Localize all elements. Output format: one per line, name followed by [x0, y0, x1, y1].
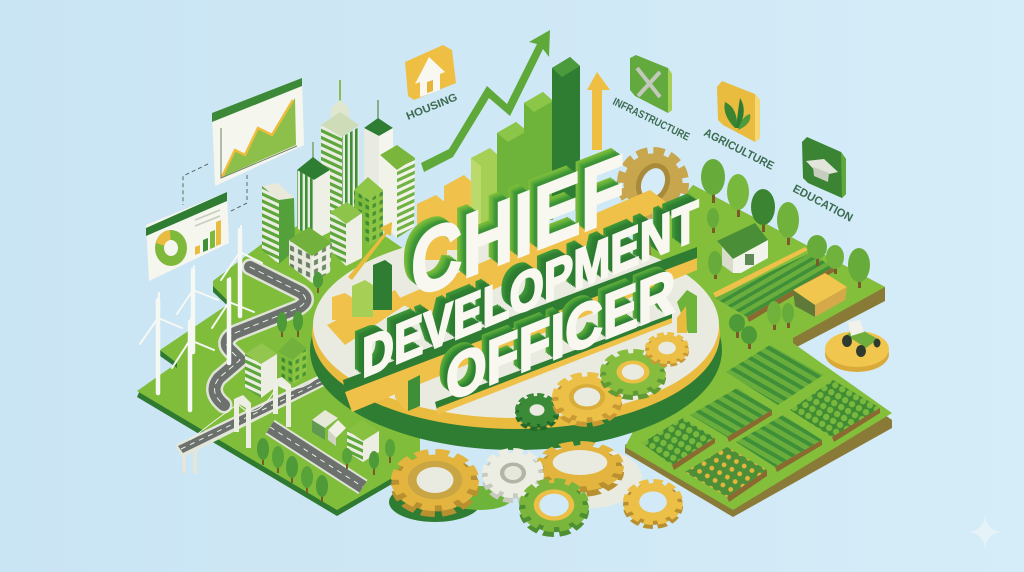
- label: education: EDUCATION: [791, 183, 854, 225]
- gears below disc: [389, 444, 679, 534]
- farm trees: [701, 159, 870, 349]
- icon: housing: [405, 45, 456, 100]
- farm house: [717, 223, 768, 273]
- icon: agriculture: [717, 81, 760, 142]
- lower road: [270, 427, 363, 487]
- dashed connector lines: [183, 164, 247, 212]
- trees bottom row: [257, 438, 395, 502]
- trees near city: [277, 272, 323, 337]
- panel: right farm land: [600, 185, 892, 517]
- panel: central disc: [310, 232, 722, 450]
- chart window: donut and bars: [146, 192, 229, 281]
- panel: left city land: [137, 205, 420, 516]
- barn: [793, 273, 847, 317]
- label: housing: HOUSING: [405, 91, 459, 123]
- wind turbines: [140, 226, 262, 410]
- icon: infrastructure: [630, 55, 672, 113]
- gears on disc: [518, 334, 686, 429]
- chart window: line chart: [212, 78, 304, 186]
- arrow: yellow up: [587, 72, 610, 150]
- gear: gold behind title: [621, 151, 685, 215]
- label: agriculture: AGRICULTURE: [702, 127, 776, 173]
- title: OFFICER: OFFICER: [446, 255, 675, 416]
- icon: sparkle watermark: [969, 516, 1001, 548]
- icon: education: [802, 137, 846, 198]
- small houses and building: [312, 410, 379, 462]
- farm fields: [642, 345, 880, 502]
- small bars on disc: [332, 222, 697, 411]
- road: winding: [215, 267, 306, 405]
- title: CHIEF: CHIEF: [411, 136, 624, 319]
- mid-rise buildings: [245, 337, 307, 398]
- bar chart rising: [417, 57, 580, 260]
- yellow platforms behind title: [327, 190, 697, 415]
- arrow: green trend line: [421, 30, 550, 172]
- label: infrastructure: INFRASTRUCTURE: [611, 96, 691, 144]
- city skyline buildings: [262, 80, 415, 283]
- bridge: [175, 370, 340, 474]
- tractor on yellow pad: [825, 320, 889, 372]
- title: DEVELOPMENT: DEVELOPMENT: [362, 188, 699, 390]
